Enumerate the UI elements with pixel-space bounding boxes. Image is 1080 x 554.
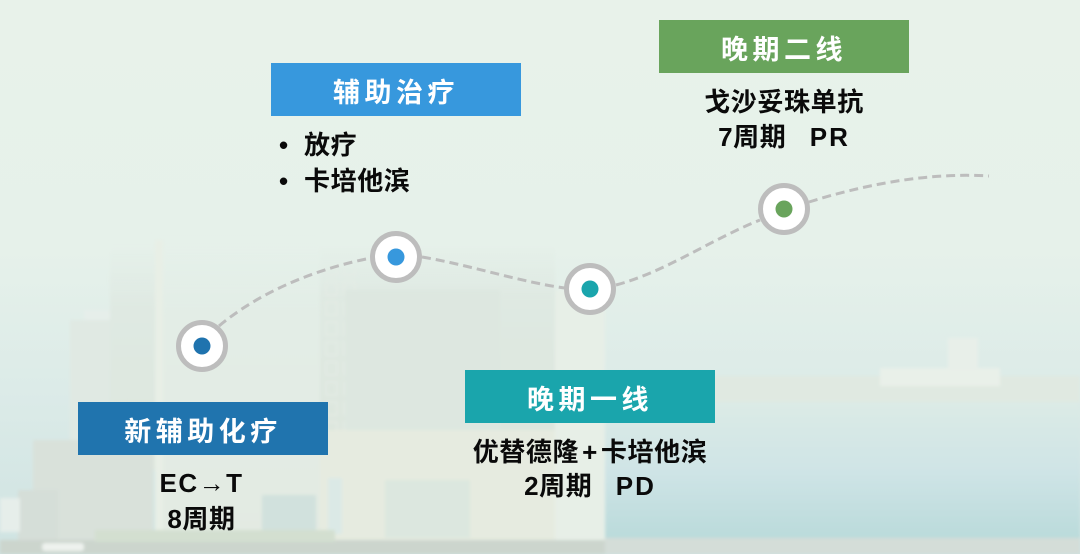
text: 放疗 卡培他滨 list xyxy=(279,130,410,196)
heading: 晚期一线: 晚期一线 xyxy=(527,385,653,415)
heading: 晚期二线: 晚期二线 xyxy=(721,35,847,65)
heading: 晚期一线 xyxy=(465,370,715,423)
heading: 辅助治疗: 辅助治疗 xyxy=(333,78,459,108)
text: 放疗 卡培他滨 list: • xyxy=(279,130,289,160)
text: 放疗 卡培他滨 list: 卡培他滨 xyxy=(304,166,410,196)
text: 放疗 卡培他滨 list: • xyxy=(279,166,289,196)
heading: 晚期二线 xyxy=(659,20,909,73)
node: adjuvant therapy xyxy=(370,231,422,283)
node: neoadjuvant chemotherapy xyxy=(176,320,228,372)
heading: 辅助治疗 xyxy=(271,63,521,116)
text: 戈沙妥珠单抗 7周期 PR: 戈沙妥珠单抗 7周期 PR xyxy=(704,87,864,152)
node: second-line advanced xyxy=(758,183,810,235)
heading: 新辅助化疗 xyxy=(78,402,328,455)
text: EC→T 8周期: EC→T 8周期 xyxy=(160,468,244,534)
node: first-line advanced xyxy=(564,263,616,315)
heading: 新辅助化疗: 新辅助化疗 xyxy=(124,417,282,447)
text: 优替德隆+卡培他滨 2周期 PD: 优替德隆+卡培他滨 2周期 PD xyxy=(473,437,707,501)
text: 放疗 卡培他滨 list: 放疗 xyxy=(304,130,357,160)
